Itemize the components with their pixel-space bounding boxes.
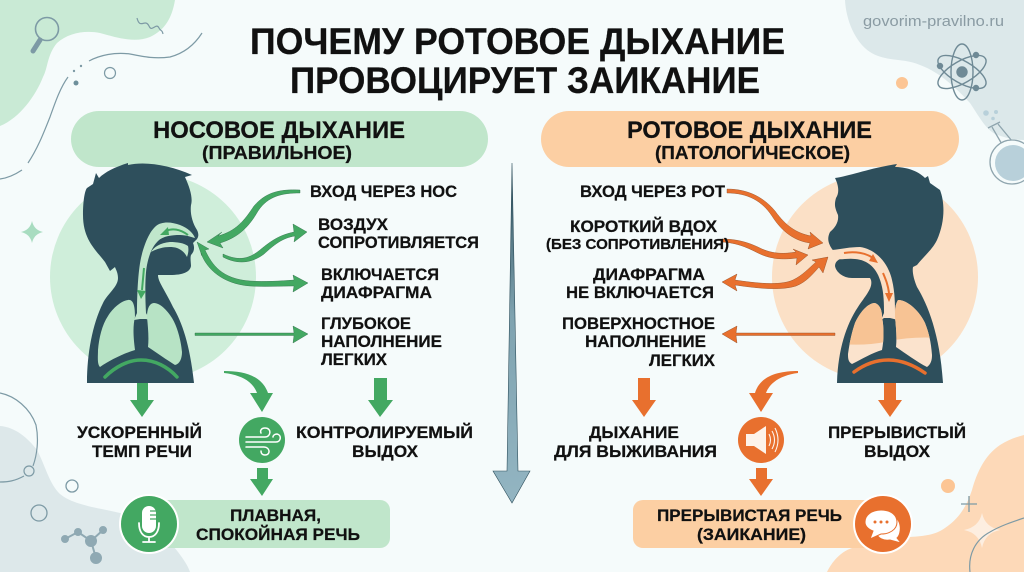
airway arrows (142, 229, 188, 290)
panel: broken speech result (633, 500, 873, 548)
decoration: green star (21, 221, 43, 243)
labels: mouth side: (БЕЗ СОПРОТИВЛЕНИЯ) (546, 237, 729, 253)
panel: mouth breathing header (541, 111, 959, 167)
head and torso silhouette (83, 163, 198, 383)
airway arrows (844, 252, 889, 293)
mouth airway (832, 247, 898, 320)
nasal airway and trachea (134, 222, 195, 320)
icon: wind (239, 417, 285, 463)
background blob: top right grey (845, 0, 1024, 140)
watermark: govorim-pravilno.ru (863, 14, 1004, 30)
labels: mouth side: ЛЕГКИХ (649, 351, 716, 370)
labels: nasal side: ЛЕГКИХ (321, 350, 388, 369)
arrow: diaphragm inactive (722, 257, 828, 291)
labels: mouth outcomes: ВЫДОХ (864, 442, 931, 461)
icon: microphone (119, 494, 179, 554)
diagram: nasal breathing figure (50, 163, 256, 383)
labels: nasal side: СОПРОТИВЛЯЕТСЯ (318, 233, 479, 252)
labels: nasal side: НАПОЛНЕНИЕ (321, 332, 442, 351)
panel: mouth breathing header: (ПАТОЛОГИЧЕСКОЕ) (655, 143, 850, 163)
diaphragm (854, 360, 925, 373)
decoration: magnifier (33, 18, 58, 51)
labels: nasal outcomes: ТЕМП РЕЧИ (92, 442, 192, 461)
title: ПРОВОЦИРУЕТ ЗАИКАНИЕ (290, 60, 760, 101)
decoration: small circles top left (74, 68, 116, 86)
panel: nasal breathing header: НОСОВОЕ ДЫХАНИЕ (153, 117, 405, 144)
arrow: mouth entry (727, 189, 823, 249)
labels: mouth side: ПОВЕРХНОСТНОЕ (562, 314, 715, 333)
labels: mouth side: ДИАФРАГМА (593, 265, 705, 284)
labels: mouth side: ВХОД ЧЕРЕЗ РОТ (580, 182, 726, 201)
decoration: plus (961, 496, 977, 512)
arrow: down to broken speech (749, 468, 773, 496)
diaphragm (105, 360, 177, 377)
lungs (98, 300, 182, 367)
panel: nasal breathing header (71, 111, 488, 167)
labels: nasal outcomes (77, 423, 473, 461)
decoration: bottom right curve (970, 518, 1024, 572)
green circle backdrop (50, 174, 256, 380)
labels: nasal outcomes: ВЫДОХ (352, 442, 419, 461)
panel: smooth speech result (150, 500, 390, 548)
arrow: shallow filling (722, 326, 835, 343)
panel: broken speech result: ПРЕРЫВИСТАЯ РЕЧЬ (657, 506, 842, 525)
labels: nasal side: ДИАФРАГМА (321, 283, 432, 302)
title: ПОЧЕМУ РОТОВОЕ ДЫХАНИЕ (250, 21, 785, 62)
decoration: white star (964, 513, 1000, 548)
upper lungs shaded (850, 300, 930, 345)
icon: chat bubbles (853, 494, 913, 554)
arrow: down to speech tempo (130, 383, 154, 417)
arrow: down to survival breathing (632, 378, 656, 417)
airway arrowheads (137, 227, 169, 299)
labels: mouth side: КОРОТКИЙ ВДОХ (570, 217, 718, 236)
arrow: deep filling (195, 326, 308, 343)
labels: nasal side: ВКЛЮЧАЕТСЯ (321, 265, 439, 284)
labels: nasal outcomes: УСКОРЕННЫЙ (77, 423, 202, 442)
arrow: down to broken exhale (878, 383, 902, 417)
labels: mouth outcomes: ПРЕРЫВИСТЫЙ (828, 423, 966, 442)
decoration: bottom right dot (941, 479, 955, 493)
decoration: squiggle (137, 18, 163, 34)
arrow: short inhale (722, 239, 808, 265)
labels: mouth outcomes: ДЛЯ ВЫЖИВАНИЯ (554, 442, 717, 461)
decoration: dashed curve (0, 33, 202, 179)
labels: mouth outcomes: ДЫХАНИЕ (589, 423, 679, 442)
labels: nasal outcomes: КОНТРОЛИРУЕМЫЙ (296, 423, 473, 442)
labels: nasal side (310, 182, 479, 369)
panel: nasal breathing header: (ПРАВИЛЬНОЕ) (202, 143, 352, 163)
arrow: air resists (223, 224, 307, 262)
labels: mouth side: НАПОЛНЕНИЕ (585, 332, 706, 351)
decoration: atom (933, 44, 991, 100)
arrows: nasal inputs and outputs (195, 190, 308, 343)
peach circle backdrop (772, 174, 978, 380)
arrow: down to smooth speech (250, 468, 273, 496)
arrow: curved down to speaker icon (749, 371, 798, 412)
panel: smooth speech result: ПЛАВНАЯ, (230, 506, 321, 525)
decoration: molecule (62, 526, 106, 564)
labels: mouth side (546, 182, 729, 370)
decoration: orange dot (896, 77, 908, 89)
panel: broken speech result: (ЗАИКАНИЕ) (697, 525, 806, 544)
diagram: mouth breathing figure (772, 164, 978, 383)
arrow: nose entry (207, 190, 300, 248)
title (250, 21, 785, 101)
background blob: bottom right peach (827, 435, 1024, 572)
background blob: bottom left grey (0, 426, 190, 572)
arrow: diaphragm activates (197, 242, 308, 292)
labels: nasal side: ГЛУБОКОЕ (321, 314, 411, 333)
head and torso silhouette (828, 164, 943, 383)
arrow: curved down to wind icon (224, 371, 273, 412)
central divider arrow (493, 163, 530, 503)
panel: mouth breathing header: РОТОВОЕ ДЫХАНИЕ (627, 117, 872, 144)
labels: nasal side: ВХОД ЧЕРЕЗ НОС (310, 182, 457, 201)
airway arrowheads (869, 254, 893, 302)
icon: speaker (738, 417, 784, 463)
background blob: top left green (0, 0, 175, 126)
labels: nasal side: ВОЗДУХ (318, 215, 389, 234)
decoration: flask (983, 110, 1024, 184)
arrows: mouth inputs and outputs (722, 189, 835, 343)
mouth cavity (151, 242, 188, 257)
decoration: bottom left loop (0, 393, 37, 482)
labels: mouth side: НЕ ВКЛЮЧАЕТСЯ (566, 283, 714, 302)
arrow: down to controlled exhale (368, 378, 393, 417)
decoration: circles bottom left (31, 480, 78, 521)
panel: smooth speech result: СПОКОЙНАЯ РЕЧЬ (196, 525, 360, 544)
labels: mouth outcomes (554, 423, 966, 461)
lower lungs (848, 300, 932, 367)
